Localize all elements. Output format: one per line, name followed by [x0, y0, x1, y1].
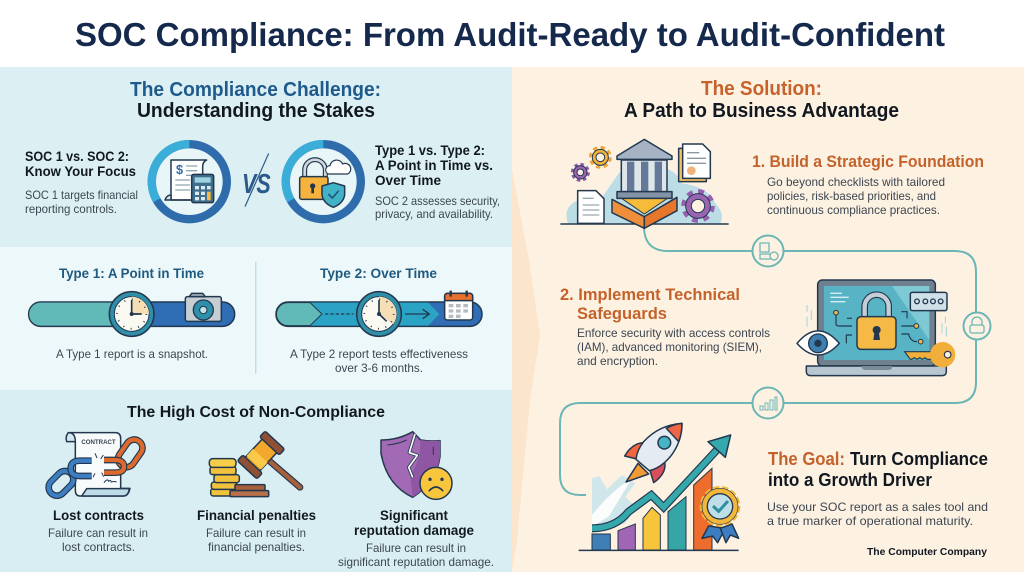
icon: padlock, cloud and shield — [282, 140, 365, 223]
text block: SOC 1 vs SOC 2: SOC 1 targets financial — [25, 188, 138, 202]
panel: the solution — [512, 67, 1024, 572]
text block: reputation damage: reputation damage — [354, 523, 474, 538]
step 1 text: 1. Build a Strategic Foundation — [752, 153, 984, 171]
heading: high cost: The High Cost of Non-Compliance — [127, 404, 385, 421]
text block: Type 1 vs Type 2: Over Time — [375, 173, 441, 188]
connector path — [560, 228, 976, 495]
text block: Type 1 vs Type 2 — [375, 143, 500, 221]
icon: rocket, growth chart and badge — [579, 423, 739, 550]
icon: node document — [752, 236, 784, 266]
text block: lost contracts: Failure can result in — [48, 526, 148, 540]
step 2 text: Safeguards — [577, 305, 667, 323]
text block: Type 1 vs Type 2: SOC 2 assesses security, — [375, 194, 500, 208]
step 2 text: and encryption. — [577, 354, 658, 368]
type 2 column: A Type 2 report tests effectiveness — [290, 347, 468, 361]
text block: lost contracts: lost contracts. — [62, 540, 135, 554]
panel: high cost of non-compliance — [0, 390, 512, 572]
text block: financial penalties: Financial penalties — [197, 508, 316, 523]
text block: SOC 1 vs SOC 2: reporting controls. — [25, 202, 117, 216]
icon: financial receipt and calculator: $ — [176, 163, 183, 177]
icon: cracked shield and sad face — [381, 432, 452, 499]
text block: SOC 1 vs SOC 2 — [25, 149, 138, 216]
goal text: into a Growth Driver — [768, 470, 932, 490]
step 1 text: policies, risk-based priorities, and — [767, 189, 936, 203]
goal text: The Goal: — [768, 449, 845, 469]
text block: financial penalties — [197, 508, 316, 554]
step 2 text: (IAM), advanced monitoring (SIEM), — [577, 340, 762, 354]
text block: lost contracts — [48, 508, 148, 554]
icon: laptop with padlock, eye and key — [797, 280, 955, 376]
text block: SOC 1 vs SOC 2: Know Your Focus — [25, 164, 136, 179]
step 2 text — [560, 286, 770, 368]
goal text: a true marker of operational maturity. — [767, 514, 973, 528]
step 1 text: continuous compliance practices. — [767, 203, 940, 217]
type 2 column: over 3-6 months. — [335, 361, 423, 375]
type 2 column: Type 2: Over Time — [320, 265, 437, 281]
step 1 text — [752, 153, 984, 217]
goal text: Use your SOC report as a sales tool and — [767, 500, 988, 514]
text block: reputation damage: significant reputation damage. — [338, 555, 494, 569]
heading: the solution — [624, 78, 899, 122]
heading: compliance challenge: Understanding the Stakes — [137, 100, 375, 122]
goal text — [767, 449, 988, 528]
text block: reputation damage: Failure can result in — [366, 541, 466, 555]
step 1 text: Go beyond checklists with tailored — [767, 175, 945, 189]
text block: SOC 1 vs SOC 2: SOC 1 vs. SOC 2: — [25, 149, 129, 164]
panel: type 1 vs type 2 timelines — [0, 247, 512, 390]
heading: the solution: A Path to Business Advantage — [624, 100, 899, 122]
icon: financial receipt and calculator — [148, 140, 231, 223]
icon: coins and gavel — [209, 431, 300, 497]
text block: reputation damage — [338, 508, 494, 569]
text block: Type 1 vs Type 2: privacy, and availability. — [375, 207, 493, 221]
goal text: Turn Compliance — [850, 449, 988, 469]
icon: VS — [242, 153, 271, 207]
icon: node lock — [964, 312, 990, 340]
icon: broken chain over contract: CONTRACT — [81, 440, 116, 446]
heading: compliance challenge — [130, 79, 381, 122]
icon: bank foundation with gears — [560, 139, 729, 228]
text block: financial penalties: Failure can result in — [206, 526, 306, 540]
timeline: type 1 with clock and camera — [29, 292, 235, 336]
type 1 column — [29, 265, 235, 361]
text block: Type 1 vs Type 2: A Point in Time vs. — [375, 158, 493, 173]
step 2 text: Enforce security with access controls — [577, 326, 770, 340]
icon: VS: VS — [242, 168, 271, 199]
step 2 text: 2. Implement Technical — [560, 286, 740, 304]
credit: The Computer Company — [867, 546, 987, 558]
type 1 column: Type 1: A Point in Time — [59, 265, 204, 281]
type 1 column: A Type 1 report is a snapshot. — [56, 347, 208, 361]
text block: financial penalties: financial penalties. — [208, 540, 305, 554]
icon: node chart — [752, 388, 784, 418]
title: SOC Compliance: From Audit-Ready to Audit-Confident — [75, 16, 945, 53]
text block: lost contracts: Lost contracts — [53, 508, 144, 523]
heading: the solution: The Solution: — [701, 78, 822, 100]
panel: compliance challenge — [0, 67, 512, 247]
text block: reputation damage: Significant — [380, 508, 448, 523]
text block: Type 1 vs Type 2: Type 1 vs. Type 2: — [375, 143, 485, 158]
timeline: type 2 with clock and calendar — [276, 291, 482, 336]
type 2 column — [276, 265, 482, 375]
heading: compliance challenge: The Compliance Challenge: — [130, 79, 381, 101]
icon: broken chain over contract — [45, 433, 146, 499]
